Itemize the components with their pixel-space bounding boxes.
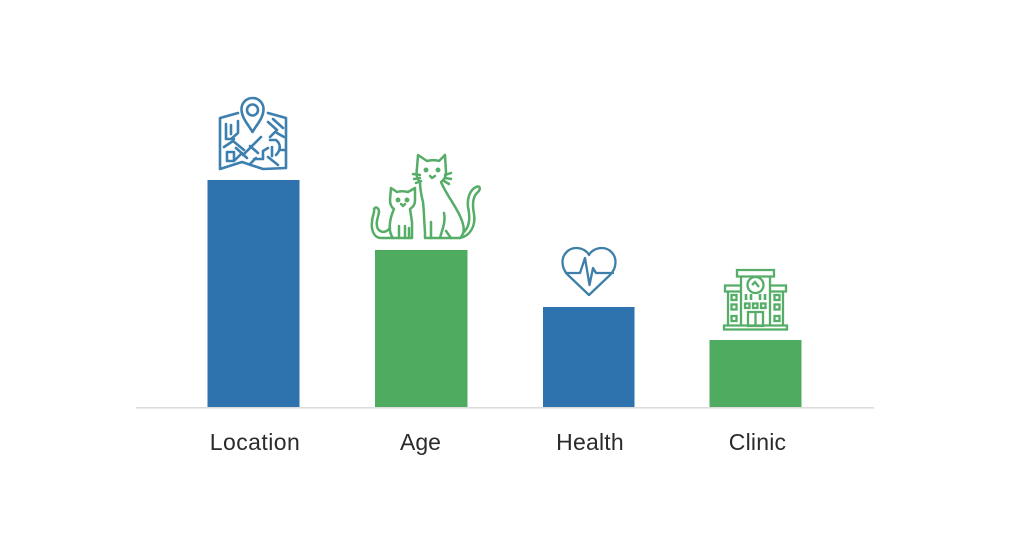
- big cat: [417, 155, 464, 238]
- label: Age: Age: [400, 429, 441, 455]
- icon: map with pin: [220, 98, 286, 169]
- label: Clinic: Clinic: [729, 429, 786, 455]
- icon: two cats: [372, 155, 480, 238]
- icon: clinic building: [724, 270, 787, 330]
- label: Location: Location: [210, 429, 300, 455]
- label: Health: Health: [556, 429, 624, 455]
- icon: heart with pulse: [562, 248, 616, 295]
- bar: Clinic: [710, 340, 802, 407]
- kitten: [390, 188, 415, 238]
- bar: Health: [543, 307, 634, 407]
- bar: Age: [375, 250, 468, 407]
- bar: Location: [208, 180, 300, 407]
